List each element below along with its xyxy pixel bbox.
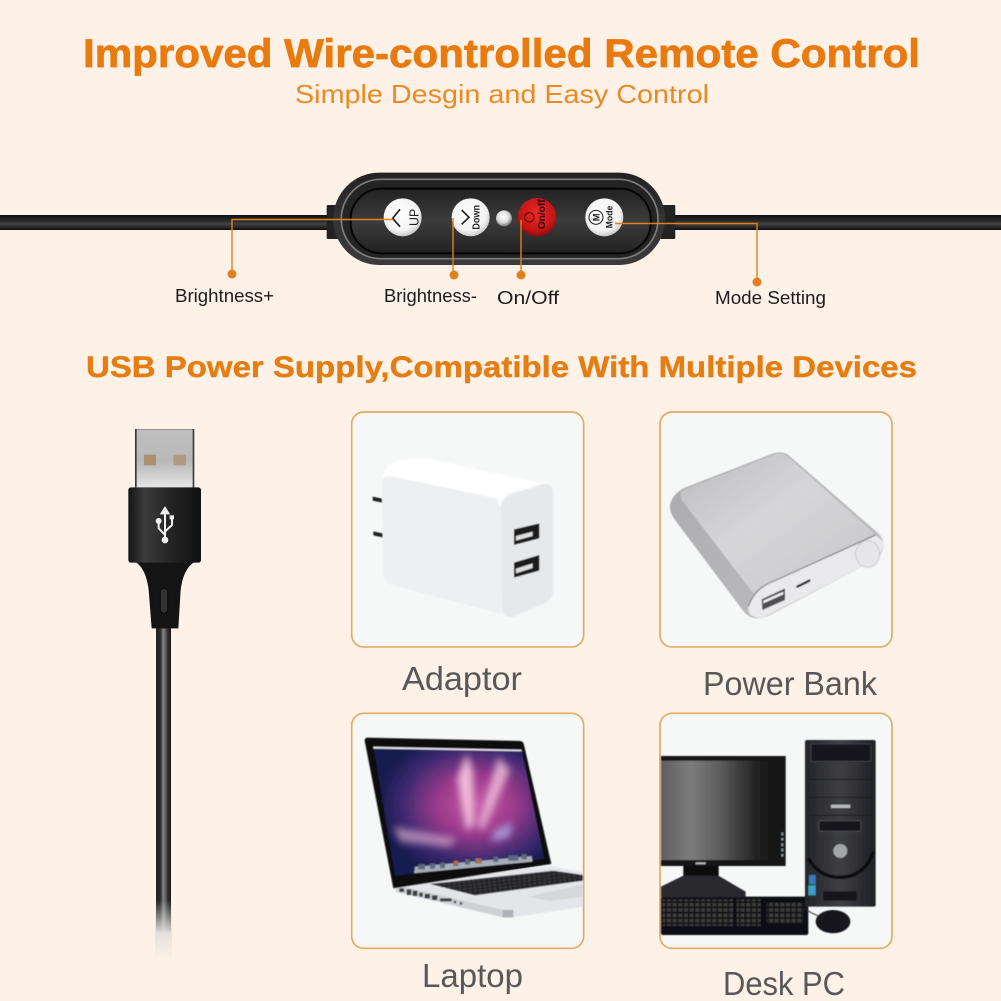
icon: laptop bbox=[365, 738, 583, 918]
callout line: brightness up bbox=[228, 220, 393, 278]
icon: mouse bbox=[804, 908, 850, 933]
icon: monitor bbox=[661, 756, 786, 897]
button: mode bbox=[585, 198, 623, 236]
label: mode setting: Mode Setting bbox=[715, 288, 826, 308]
callout line: mode bbox=[615, 224, 762, 286]
remote control unit bbox=[327, 173, 675, 265]
caption: desk PC: Desk PC bbox=[723, 965, 845, 1001]
label: on/off: On/Off bbox=[497, 288, 560, 308]
caption: laptop: Laptop bbox=[422, 957, 523, 994]
USB plug bbox=[128, 429, 201, 628]
icon: keyboard bbox=[661, 897, 808, 935]
status LED bbox=[496, 210, 512, 226]
button: up bbox=[384, 198, 422, 236]
callout line: on/off bbox=[516, 220, 526, 280]
button: mode: Mode bbox=[605, 206, 615, 228]
panel: laptop bbox=[352, 713, 584, 994]
button: down: Down bbox=[471, 205, 482, 230]
caption: adaptor: Adaptor bbox=[402, 660, 522, 697]
icon: wall adapter bbox=[373, 458, 553, 617]
icon: USB trident bbox=[157, 508, 174, 542]
panel: adaptor bbox=[352, 412, 584, 697]
caption: power bank: Power Bank bbox=[703, 665, 877, 702]
button: up: UP bbox=[407, 209, 422, 226]
label: brightness plus: Brightness+ bbox=[175, 286, 274, 306]
icon: power bank bbox=[670, 452, 884, 618]
label: brightness minus: Brightness- bbox=[384, 286, 477, 306]
USB cable bbox=[155, 625, 172, 962]
panel: power bank bbox=[660, 412, 892, 702]
button: on/off: On/off bbox=[537, 199, 548, 229]
panel: desk PC bbox=[660, 713, 892, 1001]
section heading: USB Power Supply,Compatible With Multiple Devices bbox=[86, 351, 917, 384]
button: on/off bbox=[518, 198, 556, 237]
callout line: brightness down bbox=[450, 218, 458, 280]
button: mode: M bbox=[591, 213, 601, 221]
title: Improved Wire-controlled Remote Control bbox=[83, 32, 920, 76]
subtitle: Simple Desgin and Easy Control bbox=[295, 79, 709, 109]
button: down bbox=[452, 198, 490, 236]
remote control cable bbox=[0, 215, 1001, 230]
icon: tower bbox=[805, 740, 876, 907]
